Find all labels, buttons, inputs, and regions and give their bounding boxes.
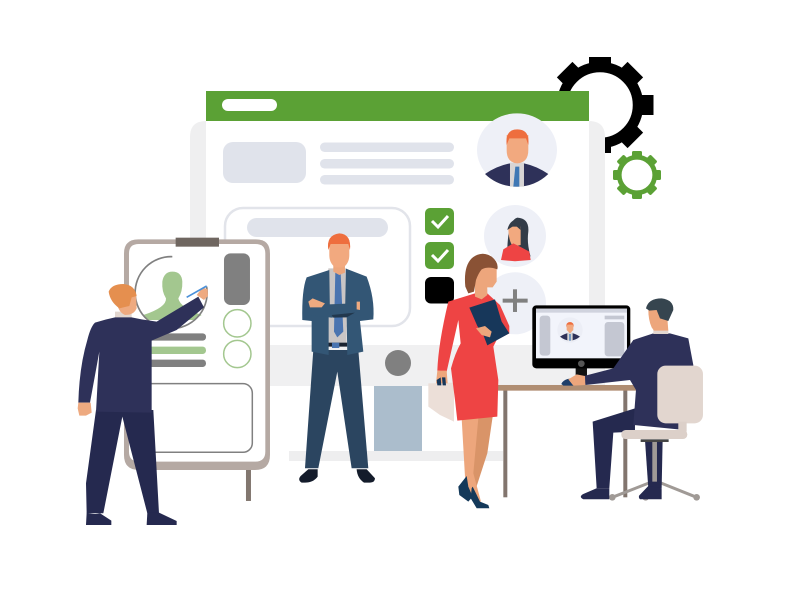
panel: profile board on easel (124, 238, 270, 501)
person: seated man at computer (561, 298, 693, 499)
person: standing man with crossed arms (299, 233, 375, 483)
folder (469, 299, 509, 345)
checkbox: empty black (425, 277, 454, 304)
person: woman in red dress holding folder and bag (428, 254, 509, 508)
furniture: desk (498, 385, 638, 497)
head and hair (475, 267, 497, 299)
panel: browser window with stand (190, 91, 605, 461)
profile photo with green silhouette (135, 257, 207, 329)
icon: small green gear (613, 151, 661, 199)
hands (476, 326, 492, 337)
legs (468, 417, 493, 488)
furniture: office chair base and seat (609, 481, 700, 501)
checkbox: checked two (425, 242, 454, 269)
icon: candidate avatar woman (484, 205, 546, 267)
furniture: office chair back and cushion (621, 366, 703, 442)
shopping bag (428, 383, 454, 422)
device: desktop monitor with profile (532, 305, 630, 377)
icon: large black gear (557, 57, 654, 153)
icon: candidate avatar man (477, 113, 557, 187)
dress (437, 293, 509, 421)
shoes (458, 476, 473, 502)
icon: add candidate plus (484, 272, 546, 334)
checkbox: checked one (425, 208, 454, 235)
person: man drawing on board (78, 284, 208, 525)
